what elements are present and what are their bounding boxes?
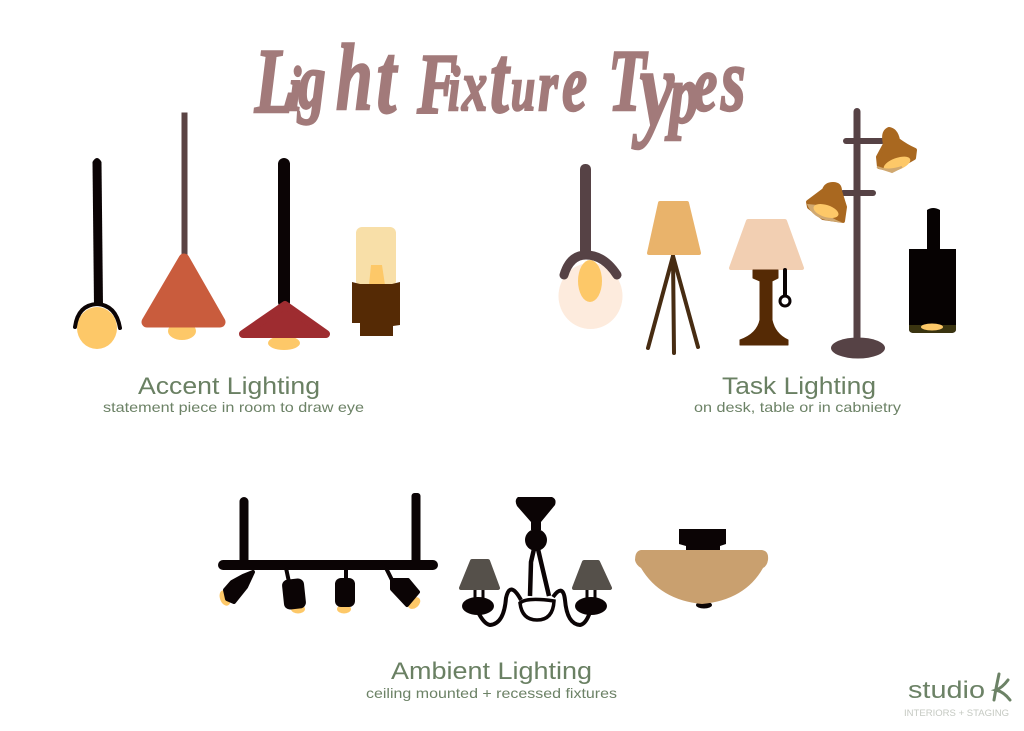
logo: studio k	[904, 674, 1010, 719]
icon: orange cone pendant	[147, 113, 220, 340]
panel: accent lighting	[75, 113, 400, 415]
title: F	[416, 38, 457, 133]
icon: globe pendant	[75, 158, 120, 349]
title: t	[377, 23, 398, 134]
icon: flush dome ceiling light	[635, 529, 768, 608]
title: x	[461, 47, 487, 126]
icon: red shade pendant	[243, 158, 326, 350]
logo: studio k: studio	[908, 677, 985, 704]
title: y	[632, 27, 675, 149]
logo: studio k: INTERIORS + STAGING	[904, 708, 1009, 719]
heading: ambient lighting: Ambient Lighting	[391, 658, 592, 685]
panel: task lighting	[558, 108, 956, 415]
title: e	[562, 38, 587, 127]
icon: track light	[218, 493, 438, 614]
heading: task lighting: Task Lighting	[722, 373, 876, 400]
icon: tripod lamp	[648, 203, 699, 353]
text: task description: on desk, table or in cabnietry	[694, 399, 901, 415]
title: g	[297, 38, 325, 125]
panel: ambient lighting	[218, 493, 768, 701]
title: s	[720, 30, 746, 130]
title: r	[538, 47, 559, 126]
text: accent description: statement piece in room to draw eye	[103, 399, 364, 415]
title: i	[448, 54, 460, 124]
title: L	[254, 31, 294, 133]
title: u	[511, 54, 535, 124]
title: T	[608, 32, 648, 130]
text: ambient description: ceiling mounted + recessed fixtures	[366, 685, 617, 701]
icon: chandelier	[461, 497, 610, 625]
title: t	[490, 26, 511, 133]
heading: accent lighting: Accent Lighting	[138, 373, 320, 400]
title: h	[336, 26, 373, 130]
icon: under-cabinet light	[909, 208, 956, 333]
icon: wall sconce	[352, 227, 400, 336]
title: e	[693, 40, 717, 127]
icon: glass globe pendant	[558, 164, 622, 329]
icon: floor lamp with two heads	[807, 108, 915, 358]
title: p	[664, 47, 699, 141]
title: i	[289, 54, 301, 124]
icon: table lamp	[731, 221, 802, 345]
